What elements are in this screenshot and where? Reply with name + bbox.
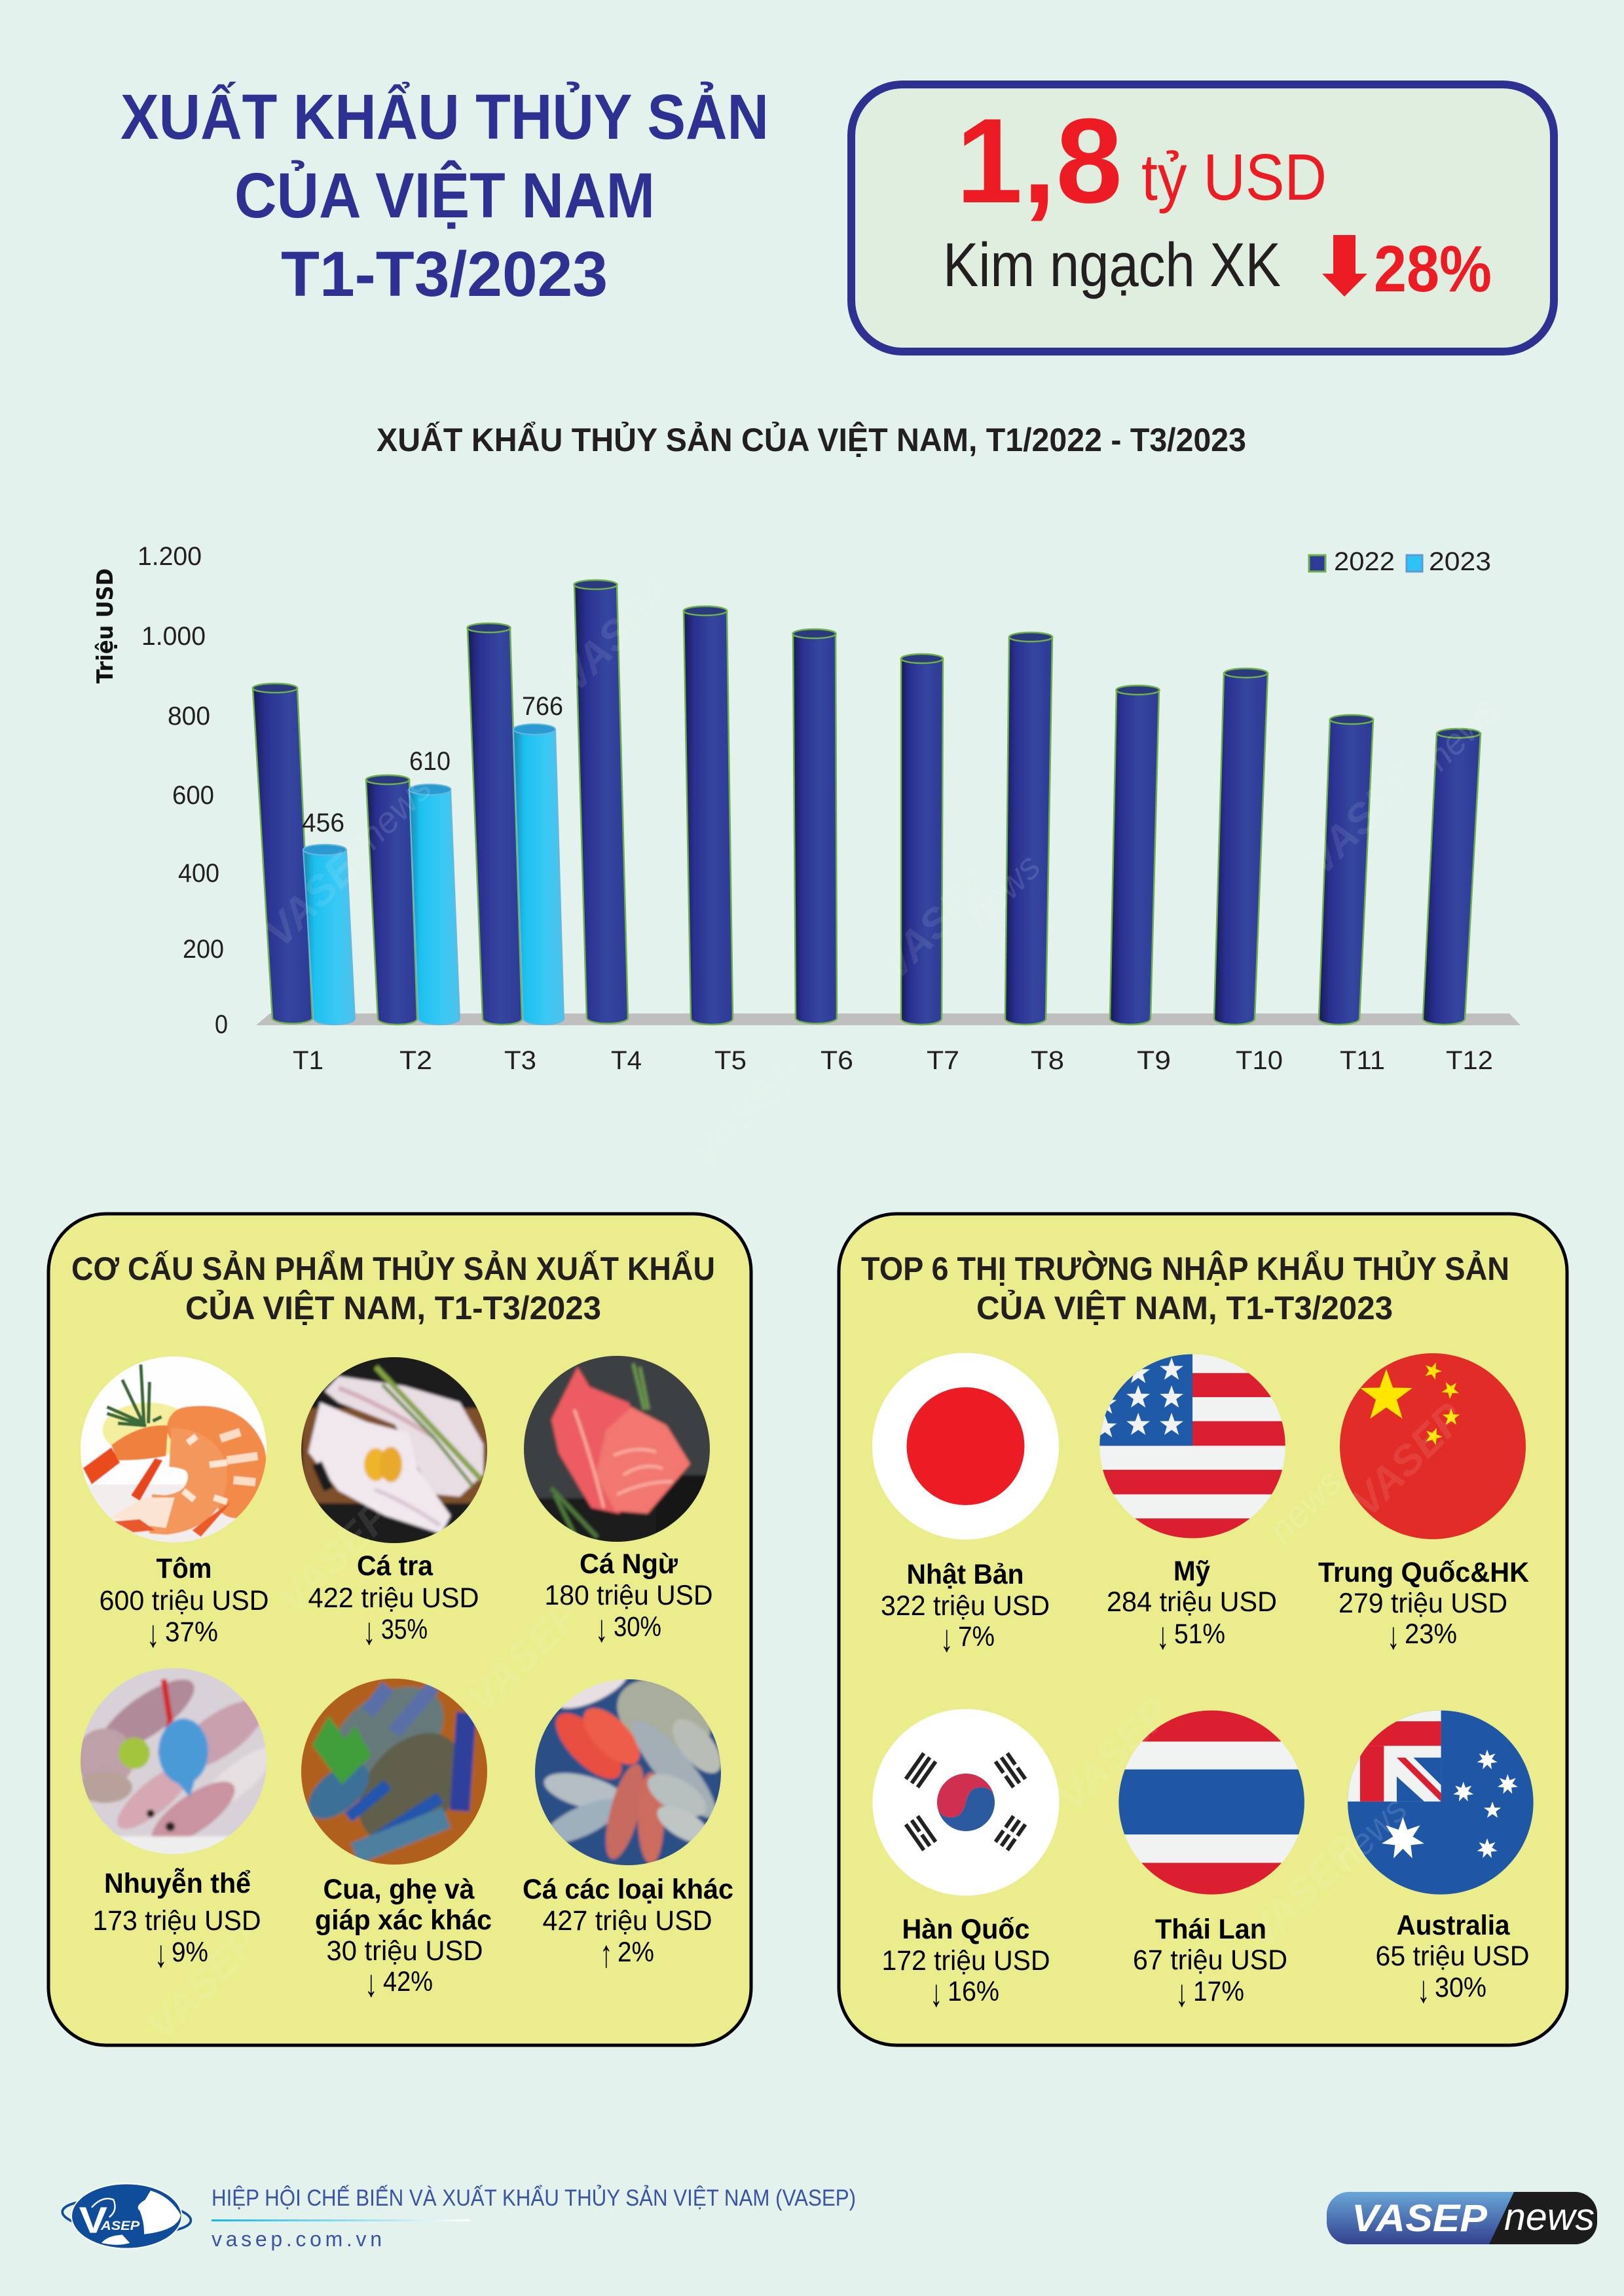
month labels: T4 — [611, 1046, 642, 1075]
change: other fish: ↑ — [600, 1933, 612, 1975]
month labels: T11 — [1340, 1046, 1385, 1075]
change: mollusc: ↓ — [155, 1933, 167, 1975]
value: Korea: 172 triệu USD — [881, 1945, 1050, 1977]
icon: VASEP logo: ASEP — [100, 2219, 139, 2233]
watermarks: news — [1325, 1788, 1415, 1878]
change: Thailand: ↓ — [1175, 1972, 1188, 2014]
y axis title: Triệu USD — [92, 568, 119, 683]
month labels: T1 — [293, 1046, 323, 1075]
photo: pangasius — [301, 1357, 487, 1543]
change: Japan: 7% — [958, 1621, 995, 1652]
data labels 2023: 766 — [522, 692, 563, 721]
item: China — [1318, 1353, 1529, 1657]
y axis labels: 800 — [168, 702, 210, 731]
y axis labels: 200 — [183, 935, 224, 964]
change: USA: 51% — [1174, 1618, 1225, 1650]
label: crab: giáp xác khác — [315, 1904, 492, 1936]
watermarks: news — [959, 845, 1048, 935]
value: other fish: 427 triệu USD — [542, 1905, 712, 1937]
change: other fish — [600, 1933, 654, 1975]
panel heading: CỦA VIỆT NAM, T1-T3/2023 — [185, 1289, 601, 1326]
label: other fish: Cá các loại khác — [523, 1874, 733, 1905]
change: China: 23% — [1405, 1618, 1457, 1650]
flag: Australia — [1346, 1708, 1536, 1897]
y axis labels — [138, 542, 228, 1039]
change: Korea: 16% — [948, 1976, 999, 2007]
panel heading — [71, 1250, 715, 1326]
change: crab: 42% — [383, 1966, 433, 1997]
watermarks: VASEP — [1342, 1394, 1473, 1525]
change: tuna: ↓ — [595, 1607, 608, 1650]
panel: top 6 markets — [839, 1214, 1567, 2045]
flag: Thailand — [1117, 1708, 1308, 1897]
label: mollusc: Nhuyễn thể — [104, 1867, 251, 1899]
panel: export value callout — [851, 84, 1554, 352]
y axis labels: 0 — [215, 1010, 228, 1039]
month labels: T7 — [927, 1046, 959, 1075]
change: USA: ↓ — [1156, 1614, 1169, 1657]
footer text: vasep.com.vn — [212, 2227, 382, 2251]
y axis labels: 400 — [178, 859, 219, 888]
panel heading: TOP 6 THỊ TRƯỜNG NHẬP KHẨU THỦY SẢN — [861, 1250, 1509, 1287]
icon: VASEP logo: V — [79, 2200, 107, 2242]
value: Japan: 322 triệu USD — [881, 1590, 1050, 1622]
change: Japan — [940, 1617, 995, 1660]
label: Korea: Hàn Quốc — [902, 1914, 1029, 1945]
bar chart — [92, 542, 1521, 1075]
item: mollusc — [75, 1663, 283, 1975]
change: crab — [365, 1962, 433, 2005]
item: tuna — [519, 1351, 715, 1650]
change 28%: 28% — [1374, 232, 1492, 306]
bars 2022 — [253, 580, 1481, 1025]
label: pangasius: Cá tra — [357, 1550, 434, 1582]
month labels: T12 — [1446, 1046, 1493, 1075]
photo: fish — [530, 1658, 730, 1870]
icon: VASEP logo — [61, 2183, 192, 2250]
watermarks: news — [350, 767, 439, 856]
data labels 2023 — [302, 692, 563, 837]
change: shrimp: ↓ — [147, 1613, 159, 1655]
icon: down arrow — [1322, 235, 1367, 297]
month labels: T3 — [504, 1046, 536, 1075]
month labels: T10 — [1236, 1046, 1283, 1075]
photo: shrimp — [81, 1357, 267, 1542]
y axis labels: 1.200 — [138, 542, 202, 571]
change: China — [1387, 1614, 1457, 1657]
value: shrimp: 600 triệu USD — [100, 1585, 268, 1616]
data labels 2023: 456 — [302, 809, 344, 837]
icon: VASEP news badge: news — [1504, 2196, 1595, 2238]
item: Korea — [872, 1709, 1060, 2014]
watermarks: VASEP — [137, 1918, 268, 2049]
label: crab — [315, 1874, 492, 1936]
change: Australia: 30% — [1435, 1972, 1486, 2003]
panel heading: CỦA VIỆT NAM, T1-T3/2023 — [976, 1289, 1393, 1326]
flag: Korea — [872, 1709, 1060, 1896]
label: shrimp: Tôm — [156, 1553, 212, 1584]
change: shrimp — [147, 1613, 218, 1655]
title: CỦA VIỆT NAM — [234, 160, 655, 231]
value: China: 279 triệu USD — [1338, 1588, 1507, 1619]
change: Japan: ↓ — [940, 1617, 953, 1660]
month labels: T8 — [1031, 1046, 1064, 1075]
panel: product structure — [48, 1214, 751, 2045]
month labels: T5 — [714, 1046, 747, 1075]
flag: Japan — [872, 1353, 1059, 1540]
watermarks: VASEP — [255, 824, 386, 956]
title: XUẤT KHẨU THỦY SẢN — [120, 81, 769, 153]
flag: USA — [1093, 1352, 1289, 1542]
change: pangasius: ↓ — [363, 1610, 375, 1652]
value: pangasius: 422 triệu USD — [308, 1582, 479, 1614]
value: mollusc: 173 triệu USD — [93, 1905, 261, 1937]
legend: 2023 — [1429, 547, 1491, 576]
change: pangasius: 35% — [381, 1614, 428, 1645]
change: tuna: 30% — [614, 1611, 661, 1643]
watermarks: news — [1260, 1461, 1350, 1550]
item: shrimp — [79, 1349, 275, 1655]
watermarks: VASEP — [1237, 1826, 1369, 1958]
label: Thailand: Thái Lan — [1155, 1914, 1266, 1945]
watermarks — [137, 569, 1507, 2049]
change: tuna — [595, 1607, 661, 1650]
change: Australia — [1417, 1968, 1486, 2011]
month labels: T2 — [399, 1046, 432, 1075]
watermarks: VASEP — [680, 1047, 812, 1178]
change: China: ↓ — [1387, 1614, 1399, 1657]
watermarks: VASEP — [268, 1492, 399, 1624]
legend: 2022 — [1334, 547, 1395, 576]
item: Japan — [872, 1353, 1059, 1660]
change: other fish: 2% — [618, 1937, 654, 1968]
label: Japan: Nhật Bản — [906, 1559, 1024, 1590]
month labels: T9 — [1137, 1046, 1171, 1075]
change: crab: ↓ — [365, 1962, 377, 2005]
label: crab: Cua, ghẹ và — [323, 1874, 475, 1905]
change: shrimp: 37% — [165, 1616, 218, 1648]
unit: tỷ USD — [1141, 141, 1327, 214]
value: USA: 284 triệu USD — [1107, 1586, 1277, 1618]
label: Australia: Australia — [1396, 1910, 1511, 1941]
month labels — [293, 1046, 1493, 1075]
watermarks: VASEP — [870, 857, 1002, 989]
value: tuna: 180 triệu USD — [545, 1580, 712, 1611]
value 1,8: 1,8 — [956, 93, 1122, 228]
watermarks: VASEP — [1047, 1688, 1179, 1820]
flag: China — [1340, 1353, 1526, 1539]
photo: squid — [75, 1663, 283, 1859]
label: China: Trung Quốc&HK — [1318, 1557, 1529, 1588]
footer text — [212, 2185, 856, 2251]
watermarks: VASEP — [458, 1590, 589, 1722]
item: USA — [1093, 1352, 1289, 1657]
value: Thailand: 67 triệu USD — [1133, 1944, 1287, 1976]
change: Australia: ↓ — [1417, 1968, 1430, 2011]
watermarks: VASEP — [1296, 752, 1428, 884]
item: other fish — [523, 1658, 733, 1975]
icon: VASEP news badge: VASEP — [1352, 2197, 1487, 2240]
title: T1-T3/2023 — [281, 238, 608, 310]
y axis labels: 1.000 — [141, 622, 206, 651]
change: USA — [1156, 1614, 1225, 1657]
item: pangasius — [296, 1352, 492, 1652]
label: tuna: Cá Ngừ — [580, 1548, 678, 1580]
y axis labels: 600 — [172, 781, 214, 810]
change: Korea — [930, 1972, 999, 2014]
watermarks: VASEP — [549, 569, 681, 701]
value: Australia: 65 triệu USD — [1375, 1941, 1530, 1972]
panel heading — [861, 1250, 1509, 1326]
label: USA: Mỹ — [1173, 1556, 1210, 1587]
chart title: XUẤT KHẨU THỦY SẢN CỦA VIỆT NAM, T1/2022 - T3/2023 — [377, 421, 1246, 458]
photo: tuna — [519, 1351, 715, 1547]
item: Australia — [1346, 1708, 1536, 2011]
photo: crab — [296, 1667, 492, 1870]
legend — [1309, 547, 1491, 576]
month labels: T6 — [821, 1046, 853, 1075]
item: crab — [296, 1667, 492, 2005]
change: Korea: ↓ — [930, 1972, 942, 2014]
change: pangasius — [363, 1610, 428, 1652]
value: crab: 30 triệu USD — [326, 1935, 483, 1967]
label: Kim ngạch XK — [943, 230, 1281, 300]
watermarks: news — [1417, 688, 1507, 778]
change: Thailand — [1175, 1972, 1244, 2014]
title — [120, 81, 769, 310]
panel heading: CƠ CẤU SẢN PHẨM THỦY SẢN XUẤT KHẨU — [71, 1250, 715, 1287]
icon: VASEP news badge — [1327, 2192, 1597, 2244]
change: mollusc — [155, 1933, 208, 1975]
data labels 2023: 610 — [409, 747, 451, 776]
item: Thailand — [1117, 1708, 1308, 2014]
bars 2023 — [303, 724, 564, 1025]
footer text: HIỆP HỘI CHẾ BIẾN VÀ XUẤT KHẨU THỦY SẢN VIỆT NAM (VASEP) — [212, 2185, 856, 2211]
chart floor — [256, 1013, 1521, 1025]
change: mollusc: 9% — [172, 1937, 208, 1968]
change: Thailand: 17% — [1193, 1976, 1244, 2007]
